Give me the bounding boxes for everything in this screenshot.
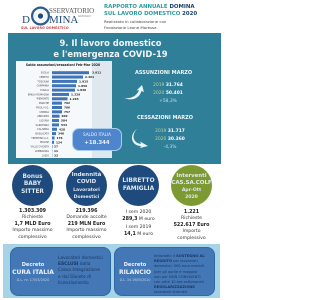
- callout: saldo italia: SALDO ITALIA: [83, 132, 111, 136]
- chart: regional balance: LAZIO: [42, 154, 49, 157]
- title: rilancio: Decreto: [124, 262, 146, 268]
- icon circle: interventi cas.sa.colf: 2020: [185, 194, 198, 200]
- stats: libretto famiglia: [122, 210, 155, 236]
- chart: regional balance: CALABRIA: [37, 128, 49, 131]
- chart: regional balance: TRENTINO A.A.: [31, 137, 49, 140]
- chart: regional balance: 1.859: [78, 84, 87, 88]
- chart: regional balance: 2.461: [85, 75, 94, 79]
- title: cura italia: D.L. nr. 17/03/2020: [17, 278, 49, 282]
- stats: interventi cas.sa.colf: 522.617 Euro: [174, 223, 209, 228]
- logo text: osservatorio: SSERVATORIO: [49, 8, 94, 15]
- chart: regional balance: 1.830: [77, 88, 86, 92]
- icon circle: indennita covid: Domestici: [74, 195, 99, 200]
- report subtitle: [104, 18, 166, 30]
- stats: bonus baby sitter: 1,7 MLD Euro: [14, 222, 50, 227]
- chart: regional balance: BASILICATA: [35, 132, 49, 136]
- logo small text: NAZIONALE: [78, 15, 91, 18]
- chart: regional balance: MOLISE: [40, 141, 49, 144]
- chart: regional balance: 3.911: [92, 71, 101, 75]
- text: cura italia: Lavoratori domestici: [58, 256, 103, 261]
- icon: rising arrow: [124, 85, 144, 100]
- text: cura italia: Cassa Integrazione: [58, 268, 100, 273]
- stats: indennita covid: 219 MLN Euro: [68, 222, 105, 227]
- stats: indennita covid: [66, 208, 107, 240]
- logo text: mina: MINA: [49, 14, 78, 26]
- stats: libretto famiglia: I sem 2020: [126, 210, 151, 214]
- stats: indennita covid: Domande accolte: [66, 215, 107, 220]
- icon: falling arrow: [132, 129, 148, 148]
- stats: libretto famiglia: 289,3 M euro: [122, 216, 155, 222]
- title: rilancio: [119, 262, 151, 282]
- chart: regional balance: 1.915: [79, 79, 88, 83]
- assunzioni figures: 2020 50.401: [153, 91, 183, 96]
- icon circle: bonus baby sitter: [12, 165, 53, 206]
- stats: interventi cas.sa.colf: 1.221: [184, 210, 199, 215]
- icon circle: interventi cas.sa.colf: Interventi: [176, 172, 207, 178]
- logo eye icon: [31, 6, 50, 26]
- icon circle: libretto famiglia: LIBRETTO: [122, 178, 155, 184]
- stats: bonus baby sitter: [12, 208, 53, 240]
- stats: indennita covid: complessivo: [72, 235, 101, 240]
- chart: regional balance: VENETO: [39, 76, 49, 79]
- section heading: [53, 38, 168, 59]
- icon circle: libretto famiglia: FAMIGLIA: [123, 186, 154, 192]
- title: cura italia: CURA ITALIA: [12, 269, 54, 276]
- callout: saldo italia: [72, 128, 122, 151]
- assunzioni figures: [153, 82, 183, 104]
- report subtitle: Realizzato in collaborazione con: [104, 18, 166, 24]
- stats: bonus baby sitter: 1.303.309: [19, 209, 46, 214]
- report title: RAPPORTO ANNUALE DOMINA: [104, 4, 195, 10]
- text: cura italia: e dal Divieto di: [58, 275, 91, 280]
- chart: regional balance: LOMBARDIA: [35, 150, 49, 153]
- icon circle: bonus baby sitter: SITTER: [21, 189, 44, 195]
- chart: regional balance: PUGLIA: [40, 89, 49, 92]
- icon circle: indennita covid: COVID: [77, 179, 96, 185]
- icon circle: libretto famiglia: [118, 165, 159, 206]
- chart: regional balance: 176: [56, 136, 63, 140]
- chart: regional balance: CAMPANIA: [37, 85, 49, 88]
- stats: bonus baby sitter: Richieste: [22, 215, 43, 220]
- title: cura italia: [12, 262, 54, 282]
- logo text: d: D: [22, 14, 30, 26]
- chart: regional balance: 609: [62, 114, 68, 118]
- report subtitle: Fondazione Leone Moressa: [104, 25, 156, 30]
- text: cura italia: licenziamento: [58, 281, 89, 286]
- title: cura italia: Decreto: [22, 262, 44, 268]
- chart: regional balance: UMBRIA: [40, 111, 49, 114]
- stats: interventi cas.sa.colf: Richieste: [181, 216, 202, 221]
- chart: regional balance: FRIULI V.G.: [36, 106, 49, 109]
- header logo: [21, 6, 94, 30]
- chart: regional balance: 33: [54, 153, 58, 157]
- icon circle: indennita covid: Indennità: [72, 172, 101, 178]
- stats: bonus baby sitter: Importo massimo: [12, 228, 53, 233]
- assunzioni figures: +58,3%: [159, 99, 177, 104]
- text: rilancio: Introdotti: il SOSTEGNO AL: [154, 254, 205, 258]
- chart: regional balance: EMILIA ROMAGNA: [28, 93, 49, 96]
- chart: regional balance: PIEMONTE: [37, 98, 49, 101]
- card: decreto cura italia: [10, 247, 111, 296]
- cessazioni figures: [155, 128, 185, 150]
- title: rilancio: D.L. 34 19/05/2020: [120, 278, 150, 282]
- chart: regional balance: TOSCANA: [37, 80, 49, 83]
- panel: covid section: [8, 33, 221, 164]
- chart: regional balance: Saldo assunzioni/cessazioni Feb-Mar 2020: [26, 63, 101, 67]
- chart: regional balance: SICILIA: [41, 72, 49, 75]
- assunzioni figures: 2019 31.764: [153, 83, 183, 88]
- chart: regional balance: 124: [56, 140, 62, 144]
- chart: regional balance: VALLE D'AOSTA: [31, 146, 49, 149]
- chart: regional balance: 1.263: [70, 97, 79, 101]
- text: rilancio: REGOLARIZZAZIONE: [154, 285, 195, 289]
- stats: interventi cas.sa.colf: complessivo: [177, 236, 206, 241]
- chart: regional balance: SARDEGNA: [36, 124, 49, 127]
- chart: regional balance: 584: [61, 119, 67, 123]
- icon circle: indennita covid: Lavoratori: [73, 188, 100, 193]
- text: rilancio: (per gli aprile e maggio): [154, 270, 197, 274]
- cessazioni figures: 2020 30.360: [155, 136, 185, 142]
- icon circle: bonus baby sitter: Bonus: [22, 174, 43, 180]
- text: rilancio: [154, 254, 205, 294]
- chart: regional balance: MARCHE: [39, 102, 49, 105]
- stats: indennita covid: Importo massimo: [66, 228, 107, 233]
- icon circle: interventi cas.sa.colf: Apr-Ott: [182, 188, 201, 192]
- panel: decreti: [3, 244, 220, 298]
- stats: interventi cas.sa.colf: [174, 209, 210, 241]
- section heading: 9. Il lavoro domestico: [59, 38, 162, 48]
- icon circle: indennita covid: [66, 165, 107, 206]
- stats: bonus baby sitter: complessivo: [18, 235, 47, 240]
- stats: libretto famiglia: 14,1 M euro: [124, 232, 153, 236]
- stats: indennita covid: 219.396: [76, 209, 97, 214]
- icon circle: bonus baby sitter: BABY: [24, 181, 41, 187]
- cessazioni figures: -4,3%: [164, 144, 176, 150]
- logo tagline: SUL LAVORO DOMESTICO: [21, 26, 69, 30]
- chart: regional balance: 11: [54, 149, 58, 153]
- text: rilancio: domestici: 500 euro mensili: [154, 264, 204, 268]
- chart: regional balance: LIGURIA: [39, 119, 49, 122]
- text: cura italia: ESCLUSI dalla: [58, 262, 90, 267]
- heading: cessazioni marzo: CESSAZIONI MARZO: [137, 115, 193, 121]
- text: rilancio: non per NON CONVIVENTI: [154, 275, 201, 279]
- callout: saldo italia: +18.344: [84, 140, 110, 146]
- text: rilancio: REDDITO per lavoratori: [154, 259, 198, 263]
- chart: regional balance: 428: [59, 127, 65, 131]
- chart: regional balance: 534: [61, 123, 67, 127]
- text: rilancio: con oltre 10 ore settimanali: [154, 280, 204, 284]
- title: rilancio: RILANCIO: [119, 269, 151, 276]
- stats: interventi cas.sa.colf: Importo: [182, 229, 201, 234]
- text: cura italia: [58, 256, 103, 286]
- text: rilancio: lavoratori stranieri: [154, 290, 187, 294]
- chart: regional balance: 1.329: [71, 92, 80, 96]
- report title: SUL LAVORO DOMESTICO 2020: [104, 11, 197, 17]
- stats: libretto famiglia: I sem 2019: [126, 224, 151, 230]
- report title: [104, 4, 197, 17]
- icon circle: interventi cas.sa.colf: [171, 165, 212, 206]
- chart: regional balance: 340: [58, 132, 64, 136]
- chart: regional balance: 27: [54, 145, 58, 149]
- chart: regional balance: 792: [64, 101, 70, 105]
- chart: regional balance: ABRUZZO: [37, 115, 49, 118]
- cessazioni figures: 2019 31.717: [155, 128, 185, 134]
- heading: assunzioni marzo: ASSUNZIONI MARZO: [135, 70, 192, 76]
- icon circle: interventi cas.sa.colf: CAS.SA.COLF: [171, 180, 212, 186]
- chart: regional balance: 757: [64, 110, 70, 114]
- card: decreto rilancio: [114, 247, 215, 296]
- chart: regional balance: [16, 61, 112, 158]
- chart: regional balance: 786: [64, 106, 70, 110]
- section heading: e l'emergenza COVID-19: [53, 49, 168, 59]
